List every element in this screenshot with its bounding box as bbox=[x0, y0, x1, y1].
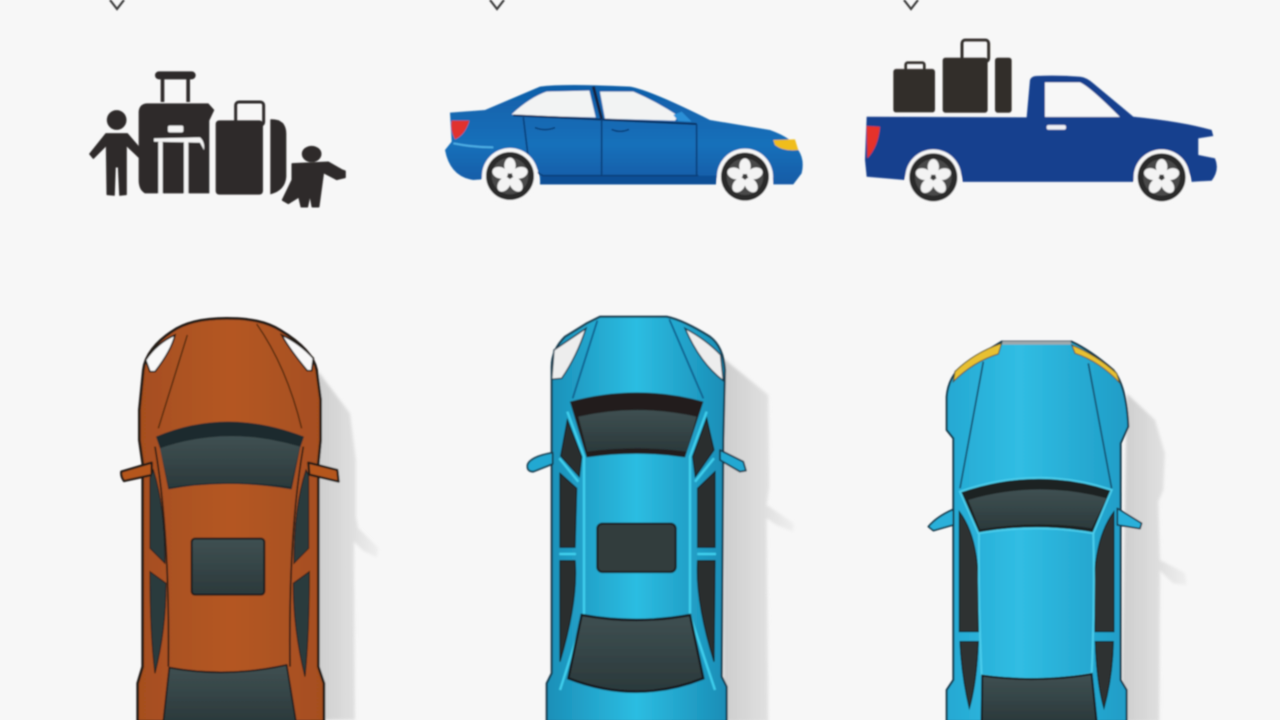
marker: middle column pointer bbox=[490, 0, 504, 9]
top view: orange car bbox=[121, 318, 378, 720]
side view: pickup with luggage bbox=[865, 40, 1217, 205]
blue coupe hood lines bbox=[960, 362, 1112, 488]
orange car roof rails bbox=[155, 447, 303, 667]
teal sedan sunroof bbox=[597, 524, 676, 572]
orange car hood lines bbox=[158, 324, 302, 428]
teal sedan body bbox=[547, 317, 727, 720]
pickup front wheel bbox=[1134, 149, 1190, 205]
sedan tail light bbox=[451, 121, 469, 139]
teal sedan pillar highlights bbox=[559, 412, 716, 690]
marker: left column pointer bbox=[110, 0, 124, 9]
teal sedan shadow bbox=[723, 358, 793, 720]
icon: adult figure bbox=[90, 111, 143, 195]
blue coupe front strip bbox=[1002, 341, 1071, 345]
pickup door handle bbox=[1047, 125, 1066, 130]
luggage in truck bed bbox=[893, 40, 1012, 113]
teal sedan headlights bbox=[552, 328, 723, 381]
icon: family with luggage bbox=[90, 71, 345, 207]
pickup body bbox=[865, 76, 1217, 182]
orange car sunroof bbox=[192, 539, 264, 595]
blue coupe yellow lights bbox=[953, 343, 1120, 383]
sedan headlight bbox=[773, 139, 798, 150]
teal sedan hood lines bbox=[573, 319, 703, 398]
pickup tail light bbox=[867, 126, 880, 158]
marker: right column pointer bbox=[904, 0, 918, 9]
teal sedan side glass bbox=[560, 418, 715, 662]
sedan side mirror bbox=[673, 112, 692, 122]
sedan rear wheel bbox=[482, 148, 538, 204]
pickup window bbox=[1045, 82, 1120, 117]
orange car shadow bbox=[317, 372, 378, 720]
icon: large suitcase bbox=[139, 71, 214, 194]
blue coupe windshield bbox=[960, 478, 1112, 533]
top view: teal sedan bbox=[527, 317, 793, 720]
orange car headlights bbox=[146, 335, 313, 372]
sedan door lines bbox=[513, 87, 698, 176]
side view: blue sedan bbox=[445, 85, 803, 205]
blue coupe body bbox=[947, 342, 1128, 720]
orange car mirrors bbox=[121, 463, 339, 482]
orange car side windows bbox=[150, 470, 309, 677]
orange car windshield bbox=[156, 422, 304, 489]
blue coupe side glass bbox=[959, 512, 1114, 708]
sedan body highlight bbox=[453, 143, 493, 147]
blue coupe mirrors bbox=[928, 508, 1142, 531]
blue coupe rear window bbox=[982, 674, 1097, 720]
teal sedan mirrors bbox=[527, 450, 746, 472]
sedan body bbox=[445, 85, 803, 184]
pickup rear wheel bbox=[905, 149, 961, 205]
sedan front wheel bbox=[717, 149, 773, 205]
blue coupe shadow bbox=[1122, 393, 1187, 720]
teal sedan rear window bbox=[568, 615, 703, 692]
blue coupe roof outline bbox=[979, 533, 1094, 679]
orange car rear window bbox=[163, 665, 296, 720]
orange car body bbox=[138, 318, 324, 720]
sedan sill bbox=[540, 176, 717, 184]
teal sedan windshield bbox=[570, 392, 703, 457]
top view: blue coupe bbox=[928, 341, 1187, 720]
icon: medium suitcase bbox=[216, 102, 286, 195]
icon: child figure bbox=[283, 147, 345, 207]
sedan rear window bbox=[512, 91, 596, 117]
sedan front window bbox=[600, 92, 678, 121]
